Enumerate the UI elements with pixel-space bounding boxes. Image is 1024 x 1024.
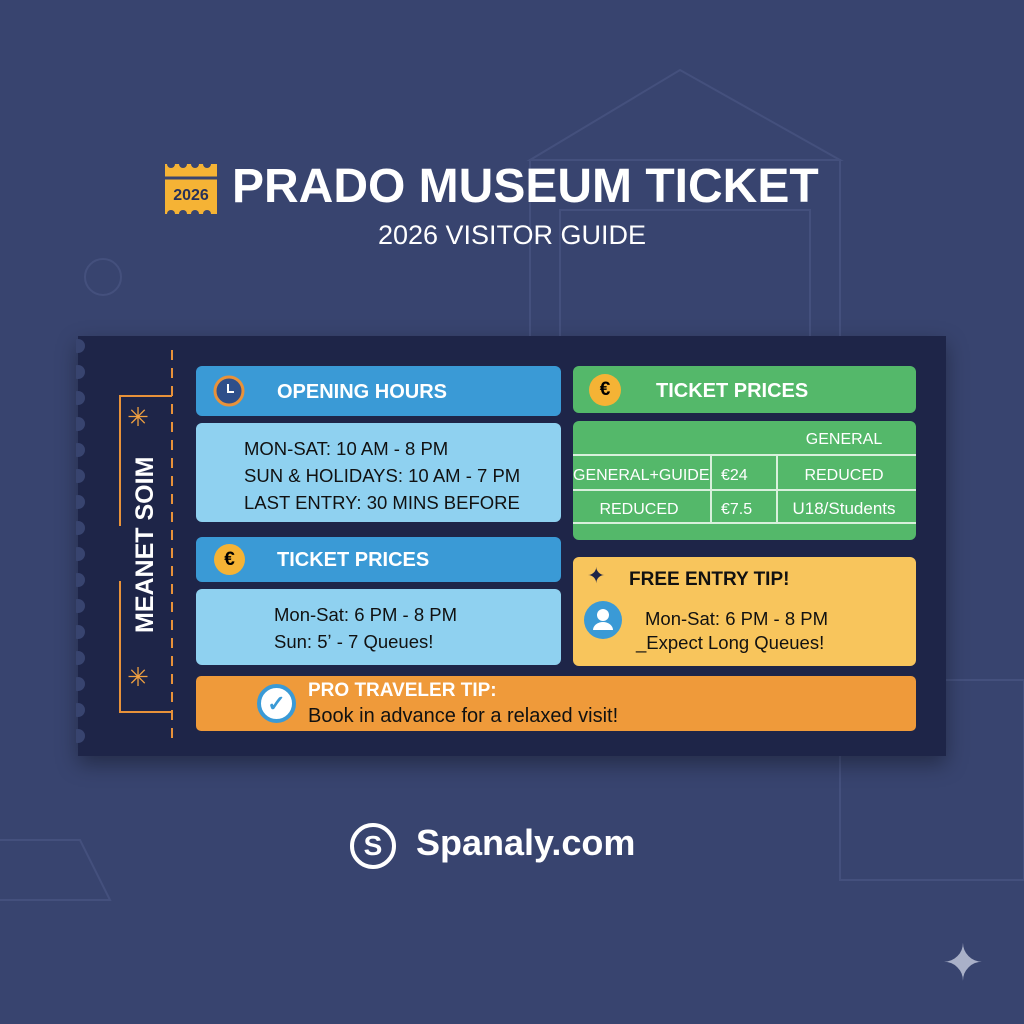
icon: euro: € — [600, 379, 610, 400]
price table: REDUCED — [599, 501, 679, 518]
callout: pro traveler tip: PRO TRAVELER TIP: — [308, 680, 497, 701]
footer logo: Spanaly.com — [416, 822, 635, 863]
icon: check: ✓ — [267, 691, 286, 716]
price table — [573, 421, 916, 540]
panel: ticket prices green: TICKET PRICES — [656, 380, 808, 402]
body — [196, 423, 561, 522]
footer logo — [350, 822, 635, 869]
price table: GENERAL — [806, 431, 882, 448]
callout: pro traveler tip — [196, 676, 916, 731]
price table: REDUCED — [804, 467, 884, 484]
callout: pro traveler tip: Book in advance for a relaxed visit! — [308, 705, 618, 727]
panel: ticket prices left: Mon-Sat: 6 PM - 8 PM — [274, 604, 457, 625]
scalloped edge — [76, 339, 85, 743]
icon: person — [584, 601, 622, 639]
icon: euro: € — [224, 549, 235, 570]
header: OPENING HOURS — [277, 381, 447, 403]
panel: ticket prices left: Sun: 5ʼ - 7 Queues! — [274, 631, 433, 652]
panel: free entry tip: _Expect Long Queues! — [636, 632, 824, 653]
icon: 2026 ticket: 2026 — [173, 187, 209, 204]
ticket — [78, 336, 946, 756]
panel: ticket prices left: TICKET PRICES — [277, 549, 429, 571]
panel: free entry tip — [573, 557, 916, 666]
icon: check — [257, 684, 296, 723]
body: MON-SAT: 10 AM - 8 PM — [244, 438, 448, 459]
header — [196, 366, 561, 416]
price table: €7.5 — [721, 501, 752, 518]
body: LAST ENTRY: 30 MINS BEFORE — [244, 492, 520, 513]
stub: MEANET SOIM — [131, 457, 159, 633]
icon: 2026 ticket — [165, 164, 217, 214]
price table: €24 — [721, 467, 748, 484]
price table: GENERAL+GUIDE — [573, 467, 709, 484]
icon: S logo: S — [364, 830, 382, 861]
panel: ticket prices green — [573, 366, 916, 540]
subtitle: 2026 VISITOR GUIDE — [378, 220, 646, 250]
stub: ✳ — [127, 402, 149, 432]
price table: U18/Students — [792, 499, 896, 518]
icon: euro — [589, 374, 621, 406]
icon: clock — [214, 376, 244, 406]
title: PRADO MUSEUM TICKET — [232, 160, 819, 213]
panel: free entry tip: Mon-Sat: 6 PM - 8 PM — [645, 608, 828, 629]
icon: S logo — [350, 823, 396, 869]
stub — [119, 350, 173, 738]
icon: sparkle corner: ✦ — [942, 935, 984, 991]
panel: free entry tip: FREE ENTRY TIP! — [629, 569, 789, 590]
icon: euro — [214, 544, 245, 575]
icon: sparkles: ✦ — [587, 563, 605, 588]
panel: opening hours — [196, 366, 561, 522]
body: SUN & HOLIDAYS: 10 AM - 7 PM — [244, 465, 520, 486]
stub: ✳ — [127, 662, 149, 692]
panel: ticket prices left — [196, 537, 561, 665]
